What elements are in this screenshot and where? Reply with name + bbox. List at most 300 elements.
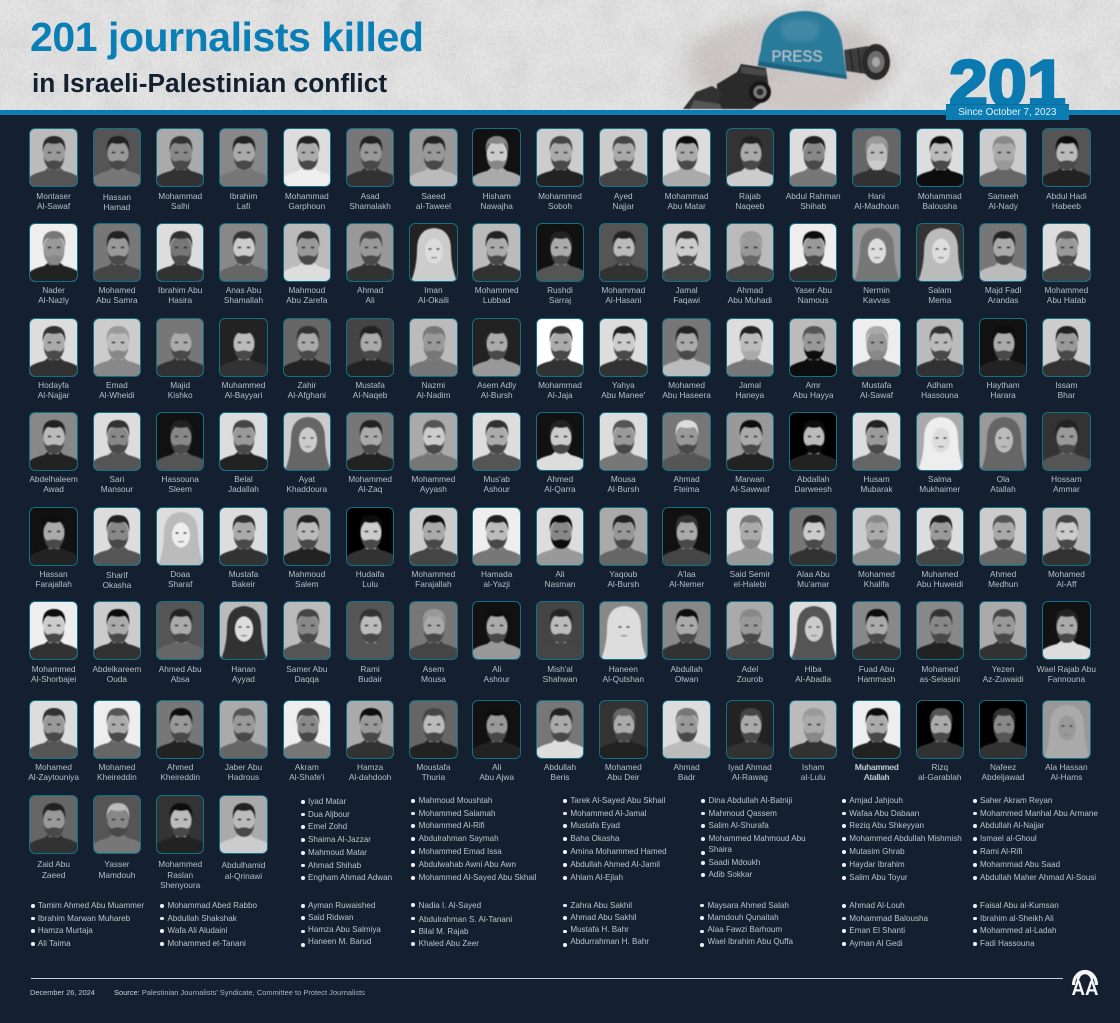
photo [93,700,141,759]
name: Nazmi [422,380,445,390]
name: Hasira [168,295,192,305]
name [538,191,582,211]
name: Jaber Abu [225,762,262,772]
name [461,380,532,400]
name: Mohammed [348,474,392,484]
name [715,762,785,782]
name: Muhammed [855,762,898,772]
name [588,474,659,494]
name: Al-Bursh [481,390,513,400]
name: Bhar [1058,390,1075,400]
name list column: Saadi Mdoukh [708,858,760,867]
card: Mohammed Al-Zaq [346,412,394,471]
name: Mohamed [1048,569,1085,579]
name: Hammash [858,674,895,684]
name [461,285,532,305]
photo [93,412,141,471]
name list column: Ayman Al Gedi [849,939,903,948]
photo [1042,700,1091,759]
name [145,569,215,589]
name: Mousa [421,674,446,684]
name [715,569,785,589]
name: Abu Haseera [662,390,711,400]
name list column: Salim Abu Toyur [849,873,908,882]
name [398,285,469,305]
photo [472,601,521,660]
name list column [419,900,512,951]
name: Haytham [986,380,1020,390]
name: Muhamed [921,569,958,579]
card: Mohammed Ayyash [409,412,458,471]
name [525,380,595,400]
name: Al-Nady [988,201,1018,211]
photo [916,318,964,377]
name: Asem Adly [477,380,516,390]
name: Al-Nazly [38,295,69,305]
name: Thuria [422,772,445,782]
name list column: Maysara Ahmed Salah [708,901,789,910]
name: Mahmoud [288,285,325,295]
name: Asem [423,664,444,674]
name list column: Mahmoud Qassem [708,809,777,818]
name: Farajallah [35,579,72,589]
name: Ahmad [737,285,763,295]
card: Samer Abu Daqqa [282,601,331,660]
name [525,285,595,305]
card: Ayed Najjar [599,128,648,211]
name: Al-Bursh [607,484,639,494]
name: Salam [928,285,952,295]
card: Mohammed Soboh [536,128,584,211]
card: Mohammad Abu Matar [662,128,711,211]
photo [852,223,901,282]
name: Al-Nemer [669,579,704,589]
photo [156,412,204,471]
name list column: Amjad Jahjouh [849,796,903,805]
name list column: Abdullah Ahmed Al-Jamil [570,860,660,869]
photo [662,601,711,660]
name: Mish'al [547,664,573,674]
name: Farajallah [415,579,452,589]
name [145,380,215,400]
card: Zahir Al-Afghani [282,318,331,377]
card: Salam Mema [916,223,964,282]
name: Majid [170,380,190,390]
name: Doaa [170,569,190,579]
name list column: Khaled Abu Zeer [419,939,479,948]
photo [219,507,268,566]
name: Al-Zaq [358,484,382,494]
name list column: Ahmad Al-Louh [849,901,905,910]
name [968,762,1038,782]
name: Abu Ajwa [479,772,514,782]
name: Hamza [357,762,383,772]
name: Amr [806,380,821,390]
photo [29,601,78,660]
photo [726,507,774,566]
card: Ali Abu Ajwa [472,700,521,759]
photo [93,318,141,377]
photo [156,700,204,759]
icon: agency logo [1070,966,1100,996]
name: Al-Hams [1050,772,1082,782]
name: Al-Afghani [288,390,326,400]
icon: camera lens [844,44,890,80]
name: Al-Wheidi [99,390,135,400]
card: Haneen Al-Qutshan [599,601,648,660]
photo [156,507,204,566]
name: al-Garablah [918,772,961,782]
card: Mish'al Shahwan [536,601,584,660]
name [651,285,722,305]
photo [789,412,837,471]
name: Medhun [988,579,1018,589]
photo [789,318,837,377]
card: Abdul Hadi Habeeb [1042,128,1091,211]
name list column: Mohammed Al-Jamal [570,809,646,818]
name: Mubarak [860,484,893,494]
name [786,191,841,211]
card: Mohammed Raslan Shenyoura [156,795,204,854]
name list column: Salim Al-Shurafa [708,821,769,830]
name: Moustafa [416,762,450,772]
name: Jamal [676,285,698,295]
photo [409,601,458,660]
photo [282,128,331,187]
photo [346,700,394,759]
name list column: Mohammed Mahmoud Abu [708,834,806,843]
name [272,569,342,589]
card: Mohamed Al-Aff [1042,507,1091,566]
name list column: Ahmad Abu Sakhil [570,913,637,922]
name [588,285,659,305]
name: Mukhaimer [919,484,960,494]
card: Haytham Harara [979,318,1027,377]
name: Abu Muhadi [728,295,772,305]
name: Mohammed [475,285,519,295]
photo [472,700,521,759]
name list column [168,900,257,951]
photo [346,223,394,282]
photo [1042,412,1091,471]
name: Najjar [612,201,634,211]
card: Mohamed Al-Zaytouniya [29,700,78,759]
photo [536,412,584,471]
name: Mohamed [98,762,135,772]
card: Majd Fadl Arandas [979,223,1027,282]
name list column: Adib Sokkar [708,870,752,879]
card: Yaser Abu Namous [789,223,837,282]
name [349,191,391,211]
name: Al-Bayyari [225,390,262,400]
name: Kishko [168,390,193,400]
photo [156,318,204,377]
photo [726,318,774,377]
card: Ahmed Abu Absa [156,601,204,660]
name: Ahmed [167,762,193,772]
card: Nermin Kavvas [852,223,901,282]
name: Lulu [362,579,378,589]
card: Mohammed Abu Hatab [1042,223,1091,282]
photo [409,318,458,377]
card: Mustafa Bakeir [219,507,268,566]
photo [93,507,141,566]
name: Al-Hasani [605,295,641,305]
name: Kheireddin [97,772,137,782]
name list column: Emel Zohd [308,822,347,831]
photo [726,223,774,282]
date badge: Since October 7, 2023 [958,107,1056,118]
name: Saeed [421,191,445,201]
name: Mohammed [158,859,202,869]
card: Rami Budair [346,601,394,660]
name: Sarraj [549,295,571,305]
photo [726,700,774,759]
card: Mus'ab Ashour [472,412,521,471]
name: Hudaifa [356,569,384,579]
name: Hassouna [162,474,199,484]
card: Mohammad Garphoun [283,128,331,211]
photo [979,128,1027,187]
name [651,380,722,400]
name list column: Abdullah Al-Najjar [980,821,1044,830]
name [904,474,975,494]
name [715,285,785,305]
card: Mohamed Khalifa [852,507,901,566]
name: Al-Bursh [607,579,639,589]
name [525,762,595,782]
name: Muhammed [222,380,265,390]
card: Rajab Naqeeb [726,128,774,211]
photo [599,128,648,187]
name list column [308,900,381,948]
name: Jamal [739,380,761,390]
name: Jadallah [228,484,259,494]
name [525,569,595,589]
photo [29,318,78,377]
name: Al-Sawaf [37,201,70,211]
photo [219,601,268,660]
name: Soboh [548,201,572,211]
photo [1042,223,1091,282]
name list column: Abdulrahman Saymah [419,834,499,843]
name: Adel [742,664,758,674]
name [208,762,279,782]
photo [916,412,964,471]
name [1031,569,1102,589]
name list column [980,900,1059,951]
name list column: Dina Abdullah Al-Batniji [708,796,792,805]
name: Yahya [612,380,635,390]
name: Mohammed [538,191,582,201]
photo [599,601,648,660]
name: as-Selasini [920,674,960,684]
photo [852,601,901,660]
name: Hodayfa [38,380,69,390]
name: Sameeh [988,191,1019,201]
name list column: Mohammed Emad Issa [419,847,502,856]
name [82,474,152,494]
card: Mohamed Abu Haseera [662,318,711,377]
name: Zaeed [42,870,65,880]
name [904,762,975,782]
name list column: Baha Okasha [570,834,619,843]
name [82,762,152,782]
card: Wael Rajab Abu Fannouna [1042,601,1091,660]
photo [852,128,901,187]
name [335,380,405,400]
photo [472,507,521,566]
name [398,762,469,782]
card: Ahmad Fteima [662,412,711,471]
name list column [419,795,536,885]
name [1031,285,1102,305]
photo [662,223,711,282]
name list column: Eman El Shanti [849,926,905,935]
name: Lafi [237,201,250,211]
name [398,474,469,494]
card: Jamal Faqawi [662,223,711,282]
card: Abdelkareem Ouda [93,601,141,660]
name [18,859,89,880]
name [335,762,405,782]
card: Majid Kishko [156,318,204,377]
name list column: Rami Al-Rifi [980,847,1022,856]
title: 201 journalists killed [30,14,423,60]
card: Abdulhamid al-Qrinawi [219,795,268,854]
name: Ali [555,569,565,579]
name list column: Mohammed Manhal Abu Armane [980,809,1098,818]
photo [726,601,774,660]
name list column [570,900,649,948]
name: Hassouna [921,390,958,400]
name list column: Ismael al-Ghoul [980,834,1037,843]
photo [93,601,141,660]
photo [409,412,458,471]
card: Ali Nasman [536,507,584,566]
name: Kheireddin [160,772,200,782]
name list column [708,900,793,948]
name [715,664,785,684]
photo [219,223,268,282]
name: Rizq [931,762,948,772]
name: Mohamed [921,664,958,674]
photo [979,700,1027,759]
name [82,664,152,684]
name: al-Taweel [416,201,451,211]
name: Zourob [737,674,763,684]
name [778,474,848,494]
photo [282,601,331,660]
name [208,474,279,494]
name [841,569,912,589]
name: Al-Abadla [795,674,831,684]
name [588,569,659,589]
name: Mustafa [355,380,385,390]
card: Said Semir el-Halebi [726,507,774,566]
card: Yaqoub Al-Bursh [599,507,648,566]
card: Abdallah Darweesh [789,412,837,471]
name: Mohammed [411,474,455,484]
name: Abu Matar [667,201,706,211]
photo [536,223,584,282]
name: Mohammed [411,569,455,579]
card: Ahmed Al-Qarra [536,412,584,471]
name: Salma [928,474,952,484]
card: Asad Shamalakh [346,128,394,211]
card: Mohamed Abu Samra [93,223,141,305]
name list column: Mohammed Salamah [419,809,496,818]
name list column: Mohammed al-Ladah [980,926,1056,935]
name [841,380,912,400]
name: Akram [295,762,319,772]
card: Mohamed as-Selasini [916,601,964,660]
photo [789,507,837,566]
name [651,762,722,782]
name: Hani [868,191,885,201]
name: Abdeljawad [982,772,1025,782]
card: Yasser Mamdouh [93,795,141,854]
name: Abdulhamid [222,860,265,870]
name: Abu Manee' [601,390,645,400]
name [398,569,469,589]
name: A'laa [677,569,696,579]
name: Mahmoud [288,569,325,579]
card: Muhammed Al-Bayyari [219,318,268,377]
name: Al-Zaytouniya [28,772,79,782]
name: Nasman [545,579,575,589]
name: Ayyash [420,484,447,494]
photo [916,601,964,660]
name: Asad [361,191,380,201]
name: Abu Samra [96,295,138,305]
name [208,664,279,684]
name [335,285,405,305]
name: Nermin [863,285,890,295]
name: Al-Shorbajei [31,674,76,684]
name [208,285,279,305]
name: Darweesh [794,484,832,494]
name list column: Wafa Ali Aludaini [168,926,228,935]
name [208,860,279,881]
name list column: Mohammed Abdullah Mishmish [849,834,962,843]
photo [916,700,964,759]
subtitle: in Israeli-Palestinian conflict [32,68,387,98]
name: Nader [42,285,65,295]
photo [536,601,584,660]
name: Garphoun [288,201,325,211]
name: Hassan [40,569,68,579]
name list column: Abdulrahman S. Al-Tanani [419,915,512,924]
name: Habeeb [1052,201,1081,211]
name: Montaser [36,191,71,201]
name: Mohamed [98,285,135,295]
name list column: Ayman Ruwaished [308,901,375,910]
name: Shenyoura [160,880,200,890]
name: Zaid Abu [37,859,70,869]
card: Hodayfa Al-Najjar [29,318,78,377]
name [904,285,975,305]
name [272,664,342,684]
card: Hassan Hamad [93,128,141,212]
name: Mus'ab [483,474,510,484]
name list column [570,795,667,885]
photo [219,795,268,854]
name list column: Zahra Abu Sakhil [570,901,632,910]
card: Mohamed Abu Deir [599,700,648,759]
name [96,285,138,305]
photo [536,128,584,187]
